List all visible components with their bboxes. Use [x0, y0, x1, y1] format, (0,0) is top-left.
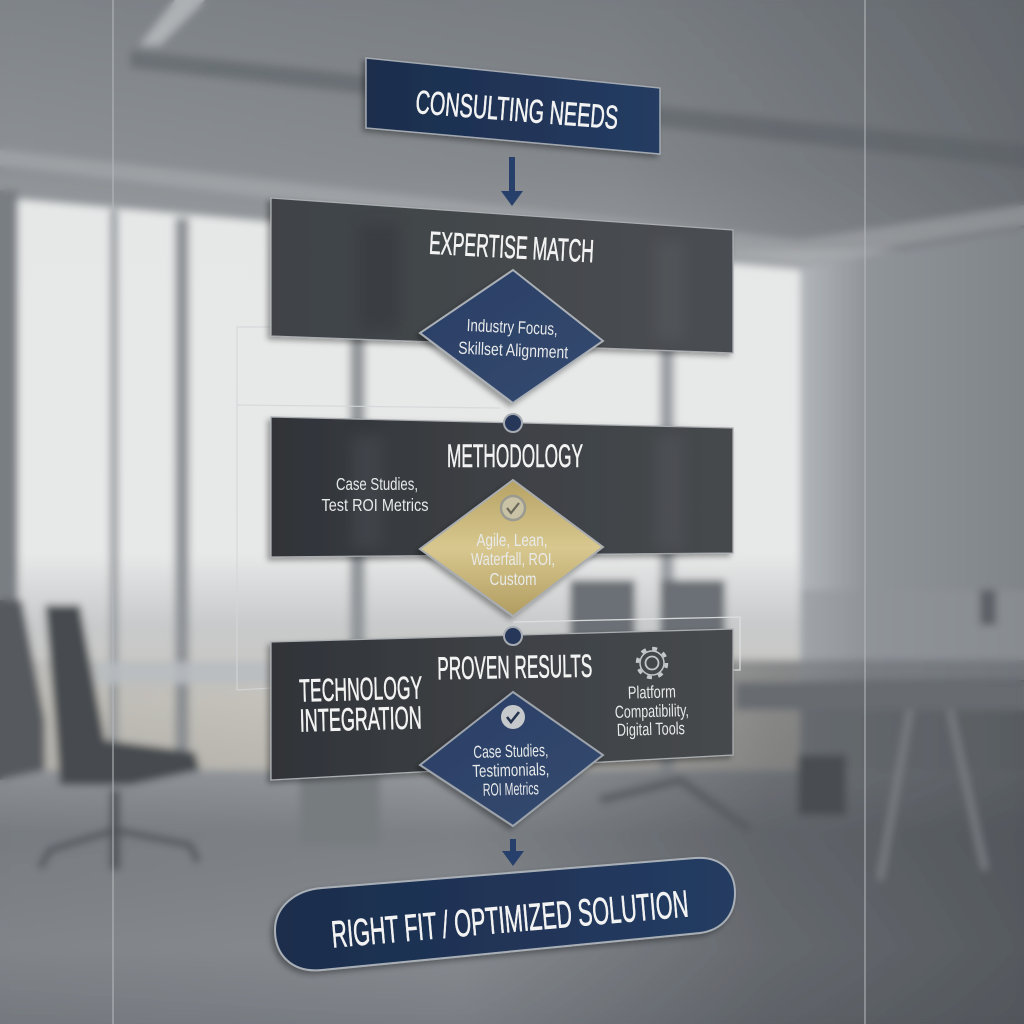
diamond: methodology detail: Custom: [490, 569, 536, 589]
diamond: proven results detail: Case Studies,: [473, 740, 549, 762]
side text: case studies: [322, 474, 429, 515]
connector lines: right frame: [513, 617, 740, 670]
connector node 1: [504, 414, 522, 432]
arrow: results to solution: [502, 839, 524, 866]
panel: proven results and technology: [271, 629, 733, 780]
diamond: proven results detail: ROI Metrics: [483, 778, 539, 800]
diamond: proven results detail: [420, 692, 603, 826]
diamond: expertise detail: Skillset Alignment: [458, 338, 569, 362]
header box: consulting needs: [366, 58, 660, 154]
heading: technology integration: TECHNOLOGY: [299, 669, 423, 709]
diamond: expertise detail: Industry Focus,: [466, 315, 558, 339]
heading: expertise match: EXPERTISE MATCH: [428, 225, 595, 269]
side text: case studies: Case Studies,: [336, 474, 418, 494]
icon: check badge: [501, 496, 525, 520]
side text: platform compatibility: Digital Tools: [617, 718, 685, 740]
icon: gear: [638, 648, 666, 678]
side text: platform compatibility: Compatibility,: [615, 700, 689, 722]
header box: consulting needs: CONSULTING NEEDS: [414, 83, 620, 136]
arrow: needs to expertise: [501, 157, 523, 206]
diamond: methodology detail: Agile, Lean,: [476, 530, 548, 550]
diamond: methodology detail: Waterfall, ROI,: [471, 549, 555, 569]
diamond: expertise detail: [420, 270, 603, 403]
panel: methodology: [271, 417, 733, 557]
diamond: methodology detail: [420, 480, 603, 616]
heading: methodology: METHODOLOGY: [447, 438, 583, 474]
side text: case studies: Test ROI Metrics: [322, 495, 429, 515]
side text: platform compatibility: [615, 681, 689, 740]
final pill: right fit optimized solution: RIGHT FIT / OPTIMIZED SOLUTION: [330, 884, 690, 957]
connector node 2: [504, 627, 522, 645]
diamond: proven results detail: Testimonials,: [472, 759, 550, 781]
final pill: right fit optimized solution: [275, 858, 735, 970]
icon: check badge: [501, 705, 525, 729]
heading: proven results: PROVEN RESULTS: [437, 648, 593, 686]
side text: platform compatibility: Platform: [628, 681, 676, 703]
panel: expertise match: [271, 198, 733, 353]
connector lines: left frame: [237, 327, 500, 690]
heading: technology integration: INTEGRATION: [299, 699, 422, 739]
heading: technology integration: [299, 669, 423, 739]
